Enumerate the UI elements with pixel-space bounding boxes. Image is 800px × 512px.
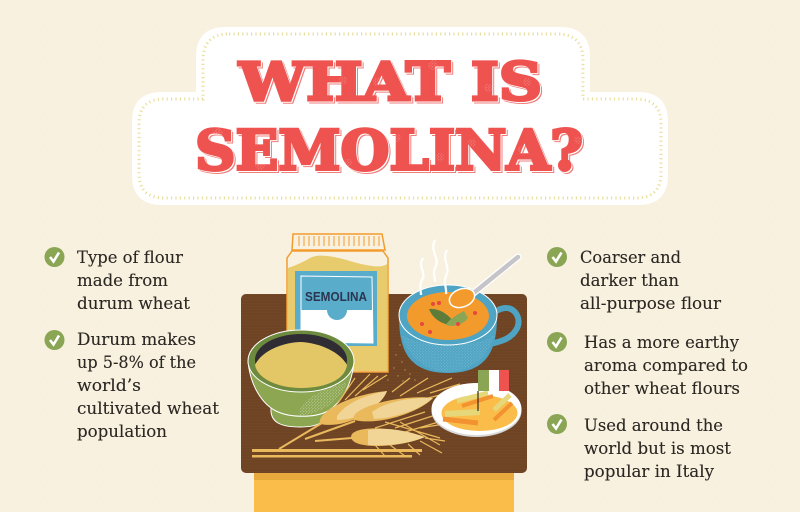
bullet text 2: cultivated wheat bbox=[77, 399, 219, 419]
check icon 4 bbox=[547, 332, 567, 352]
bullet text 4: other wheat flours bbox=[584, 379, 740, 399]
semolina dust bbox=[387, 344, 416, 382]
bullet text 5: Used around the bbox=[584, 416, 723, 436]
bullet text 2: population bbox=[77, 422, 167, 442]
wooden table bbox=[241, 294, 527, 473]
steam bbox=[420, 240, 447, 295]
bullet text 2: Durum makes bbox=[77, 330, 196, 350]
bullet text 2: world’s bbox=[77, 376, 141, 396]
right bullet list bbox=[547, 247, 748, 482]
soup pot bbox=[399, 240, 519, 373]
italian flag bbox=[478, 370, 509, 411]
left bullet list bbox=[44, 247, 219, 442]
bullet text 3: Coarser and bbox=[580, 248, 681, 268]
bullet text 1: durum wheat bbox=[77, 294, 190, 314]
bullet text 3: darker than bbox=[580, 271, 679, 291]
bullet text 1: made from bbox=[77, 271, 168, 291]
bullet text 2 bbox=[77, 330, 219, 442]
title banner bbox=[132, 27, 668, 205]
green bowl bbox=[248, 330, 354, 427]
check icon 3 bbox=[547, 247, 567, 267]
check icon 2 bbox=[44, 330, 64, 350]
title: SEMOLINA? bbox=[195, 118, 583, 182]
bullet text 5: popular in Italy bbox=[584, 462, 714, 482]
bag label: SEMOLINA bbox=[305, 290, 367, 304]
wheat bbox=[252, 374, 460, 458]
table legs bbox=[254, 470, 514, 512]
bullet text 4: Has a more earthy bbox=[584, 333, 739, 353]
wheat ear bbox=[354, 397, 433, 421]
pasta plate bbox=[432, 383, 522, 437]
title distress specks bbox=[213, 60, 582, 170]
wheat ear bbox=[320, 391, 387, 425]
bullet text 1 bbox=[77, 248, 190, 314]
wheat ear bbox=[351, 428, 425, 446]
soup bbox=[407, 292, 489, 340]
bullet text 1: Type of flour bbox=[77, 248, 184, 268]
bullet text 4: aroma compared to bbox=[584, 356, 748, 376]
title: WHAT IS bbox=[238, 52, 542, 113]
bullet text 5: world but is most bbox=[584, 439, 731, 459]
bullet text 3 bbox=[580, 248, 722, 314]
check icon 1 bbox=[44, 247, 64, 267]
pasta sauce bbox=[442, 395, 518, 431]
bullet text 2: up 5-8% of the bbox=[77, 353, 196, 373]
bullet text 5 bbox=[584, 416, 731, 482]
bullet text 3: all-purpose flour bbox=[580, 294, 722, 314]
title bbox=[195, 52, 583, 182]
bullet text 4 bbox=[584, 333, 748, 399]
bay leaves bbox=[429, 309, 455, 325]
semolina in bowl bbox=[255, 342, 347, 388]
spoon bbox=[447, 257, 518, 311]
semolina bag bbox=[287, 234, 388, 372]
check icon 5 bbox=[547, 414, 567, 434]
